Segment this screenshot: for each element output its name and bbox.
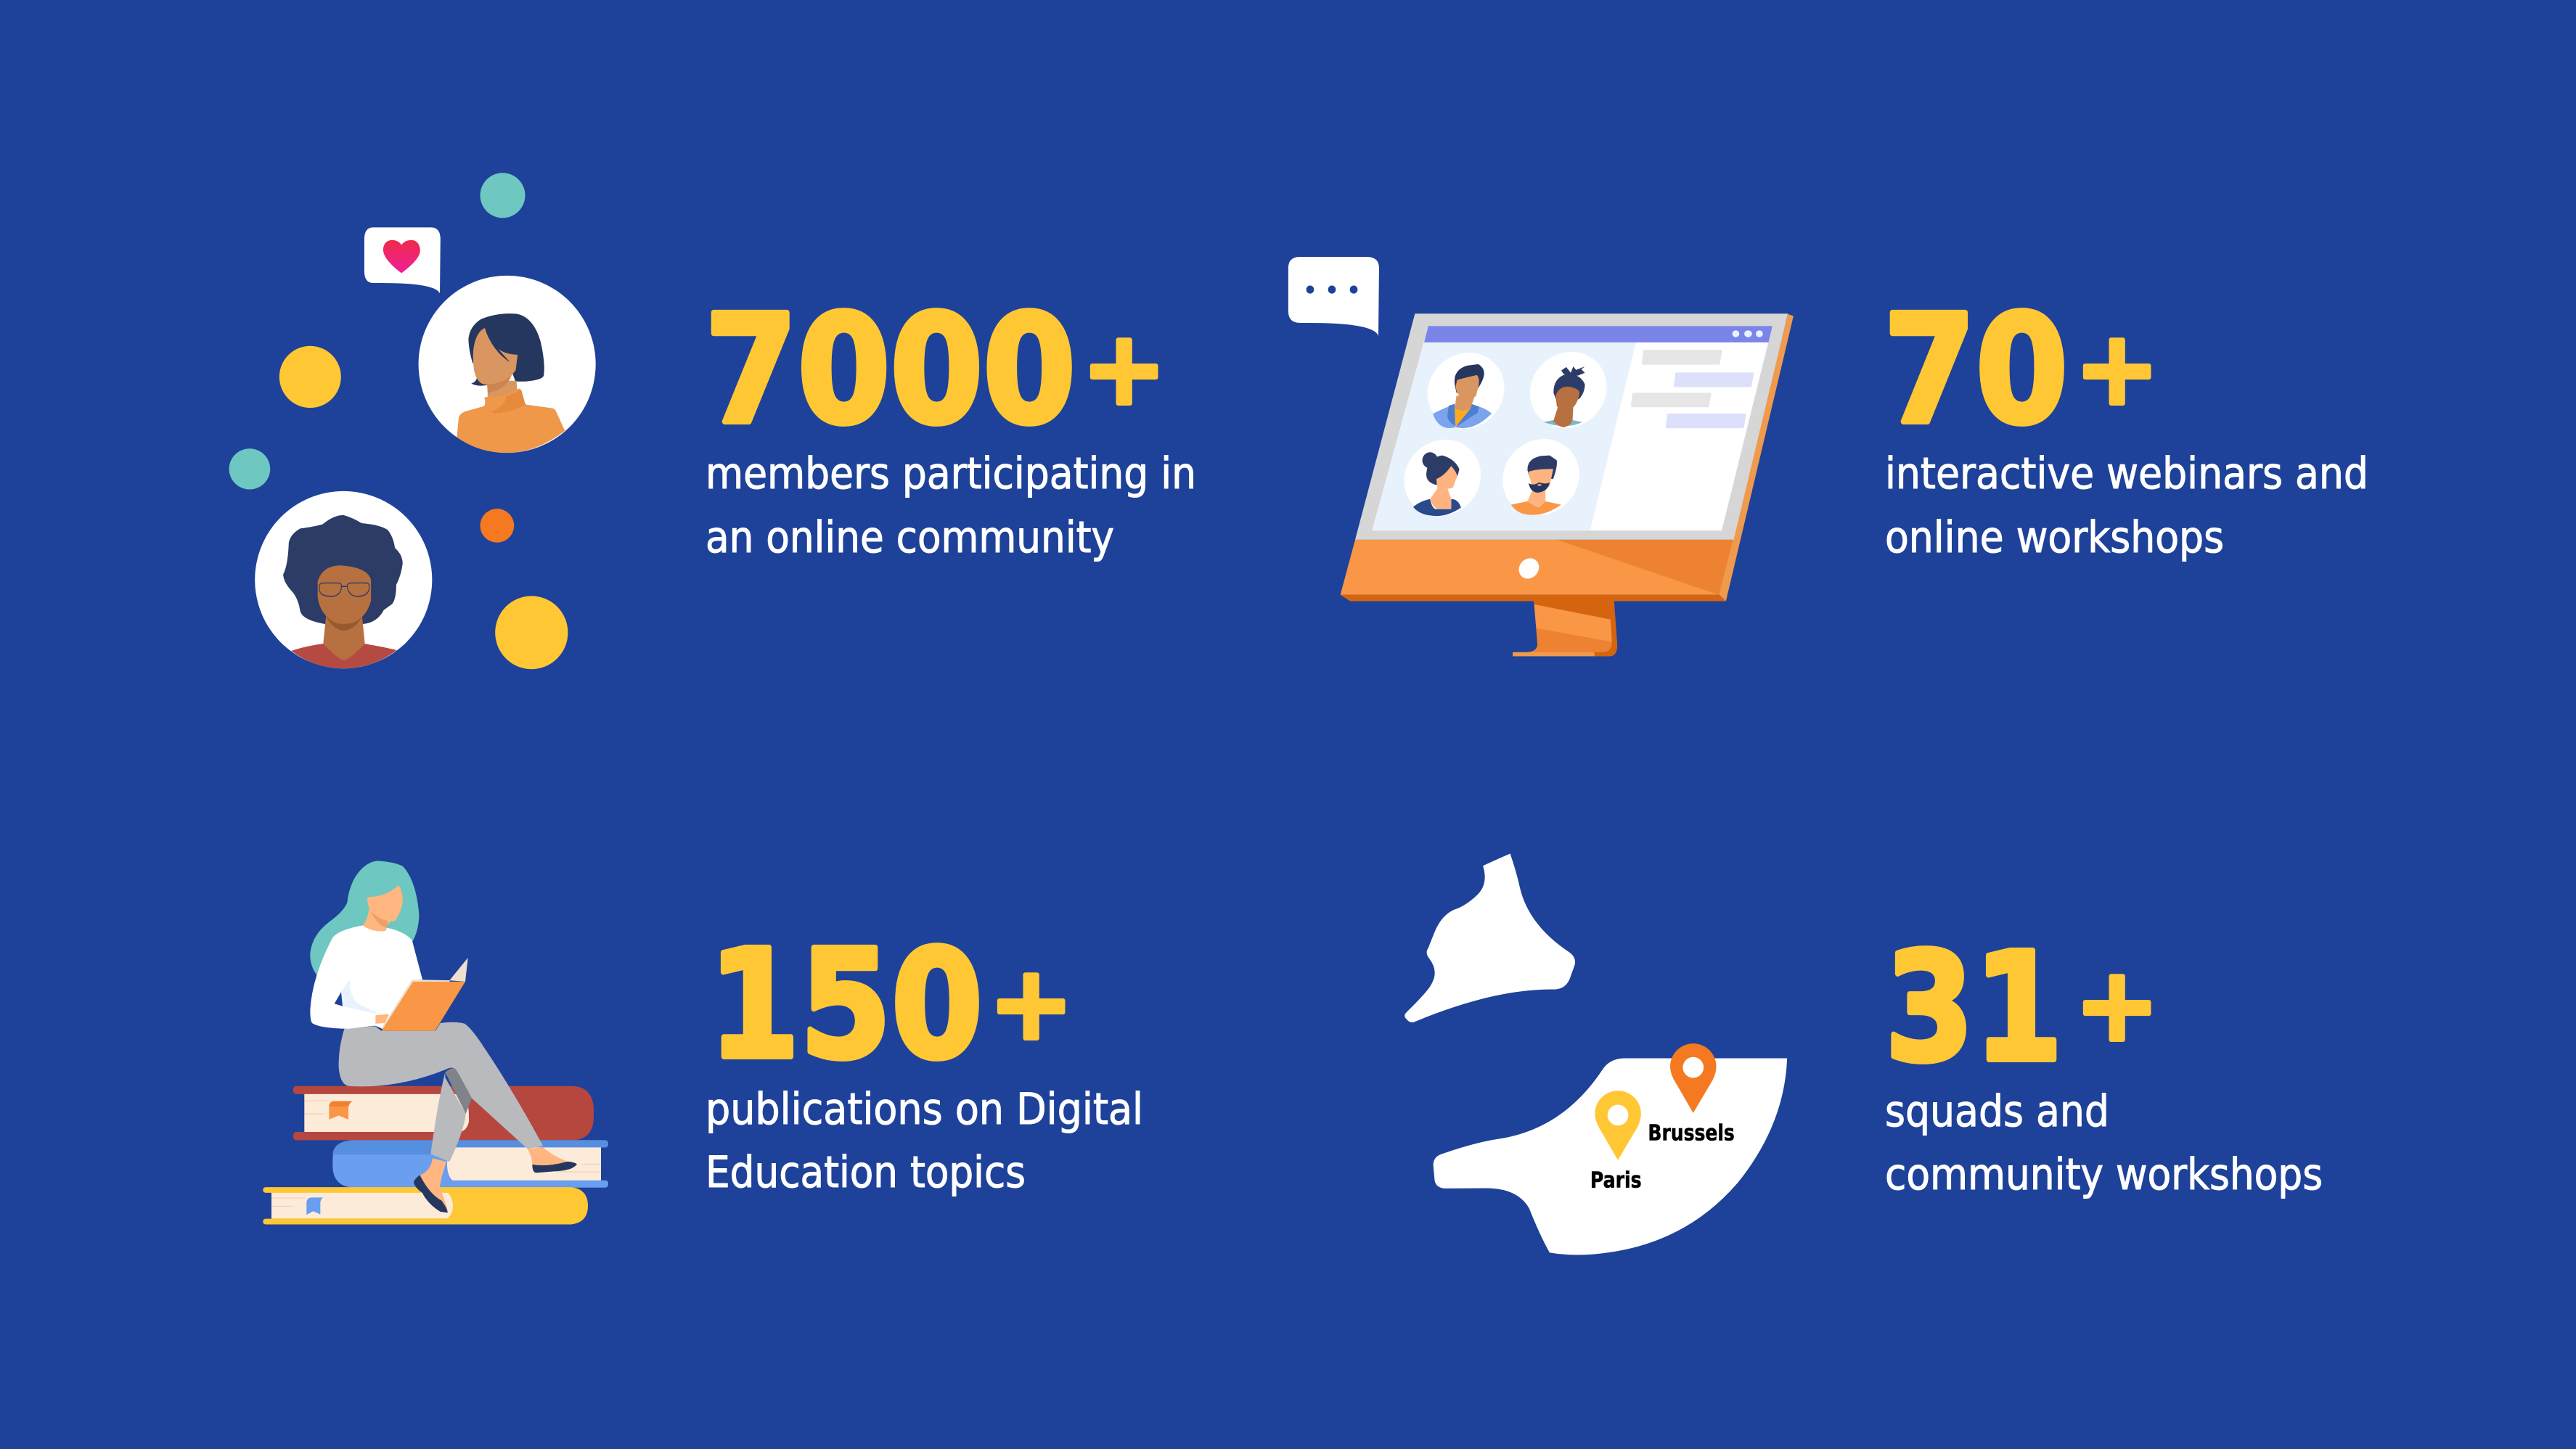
speech bubble with heart xyxy=(364,227,441,294)
panel: publications xyxy=(263,861,1143,1224)
chat messages xyxy=(1632,351,1752,427)
description: members: members participating in xyxy=(706,448,1196,499)
stat: 31+: + xyxy=(2074,946,2159,1064)
description: webinars: interactive webinars and xyxy=(1885,448,2368,499)
stat: 7000+: + xyxy=(1081,310,1166,428)
speech bubble with dots xyxy=(1288,257,1379,336)
panel: squads xyxy=(1404,853,2323,1255)
screen xyxy=(1372,326,1772,530)
avatar: man with beard xyxy=(1495,434,1587,521)
illustration: community avatars xyxy=(229,173,596,669)
description: webinars: online workshops xyxy=(1885,512,2224,563)
stat: 7000+: 7000 xyxy=(705,283,1076,457)
map shape: upper xyxy=(1404,853,1575,1022)
avatar: woman with bun xyxy=(1396,434,1489,522)
panel: webinars xyxy=(1288,257,2368,656)
person reading xyxy=(310,861,577,1212)
panel: online community xyxy=(229,173,1196,669)
description: publications: publications on Digital xyxy=(706,1084,1143,1135)
stat: 31+: 31 xyxy=(1885,921,2063,1095)
dot: teal top xyxy=(481,173,525,218)
label: Paris: Paris xyxy=(1590,1167,1642,1193)
stat: 150+: 150 xyxy=(708,918,983,1092)
dot: teal left xyxy=(229,448,270,490)
stat: 70+: + xyxy=(2074,310,2159,428)
book: blue xyxy=(332,1140,608,1188)
stat: 70+: 70 xyxy=(1884,283,2068,457)
book: yellow xyxy=(263,1187,588,1224)
description: squads: community workshops xyxy=(1885,1149,2323,1200)
description: publications: Education topics xyxy=(706,1147,1026,1198)
monitor body xyxy=(1341,313,1794,601)
book: red xyxy=(293,1086,594,1140)
pin: Brussels xyxy=(1670,1043,1717,1113)
dot: yellow bottom xyxy=(495,596,568,669)
dot: orange xyxy=(481,509,514,543)
map shape: lower xyxy=(1434,1058,1787,1255)
pin: Paris xyxy=(1595,1091,1641,1160)
label: Brussels: Brussels xyxy=(1648,1120,1735,1146)
dot: yellow left xyxy=(279,346,341,408)
avatar: person with top knot xyxy=(1522,346,1614,434)
stat: 150+: + xyxy=(989,945,1074,1063)
avatar: man in blue jacket xyxy=(1420,348,1512,435)
monitor stand xyxy=(1513,601,1617,656)
description: squads: squads and xyxy=(1885,1086,2109,1137)
avatar: woman with glasses xyxy=(255,491,432,668)
description: members: an online community xyxy=(706,512,1114,563)
illustration: woman reading on books xyxy=(263,861,608,1224)
illustration: map with pins xyxy=(1404,853,1787,1255)
illustration: monitor with video call xyxy=(1288,257,1794,656)
avatar: woman with bob hair xyxy=(419,276,596,453)
